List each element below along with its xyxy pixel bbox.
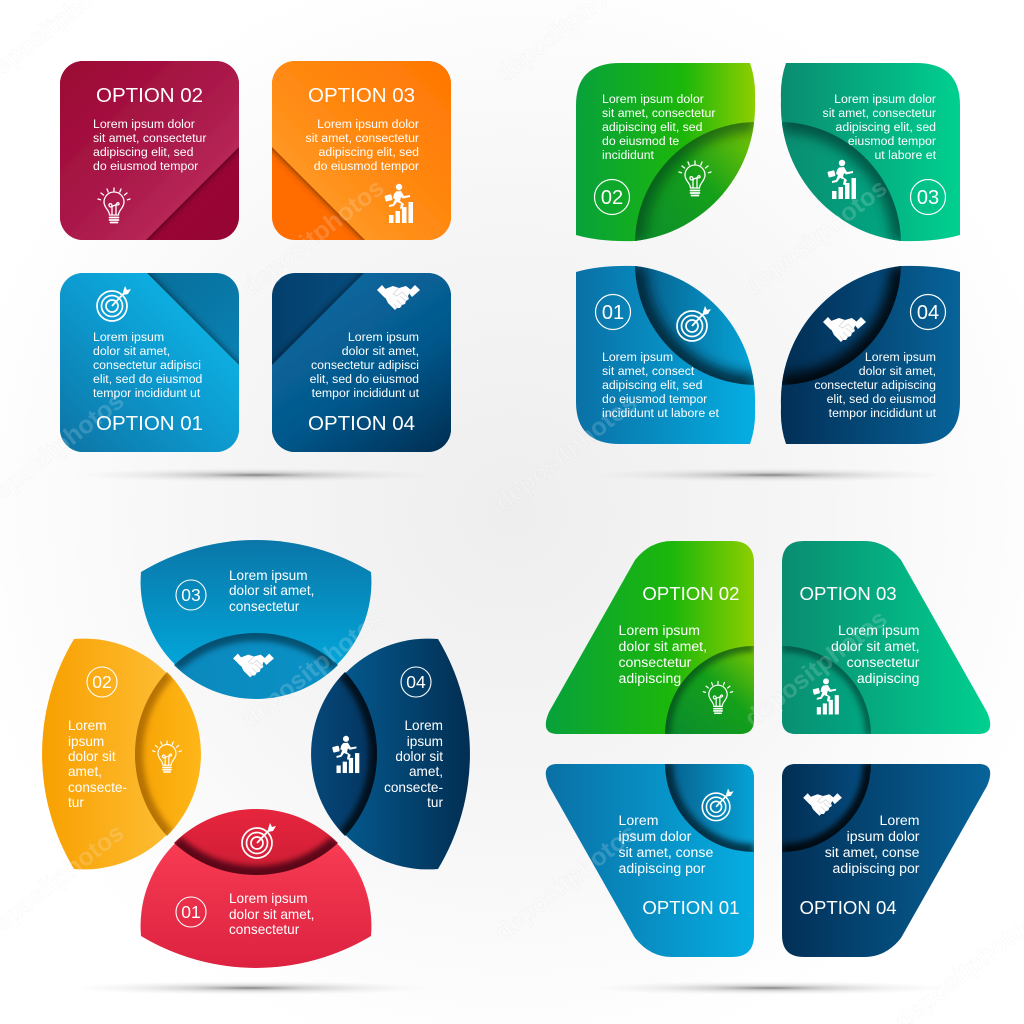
watermark: depositphotos (236, 605, 389, 733)
leaf shape: teal (780, 63, 960, 242)
text block: option 01: consectetur adipisci (93, 358, 201, 372)
leaf shape: green (576, 63, 756, 242)
text block: option 04: dolor sit amet, (342, 344, 419, 358)
text block: option 03: sit amet, consectetur (306, 131, 419, 145)
petal: 01 (136, 804, 376, 968)
text block: option 04: adipiscing por (833, 860, 920, 876)
text block: option 02: dolor sit amet, (618, 638, 707, 654)
text block: 04: amet, (409, 764, 443, 779)
text block: 04: Lorem (404, 718, 443, 733)
text block: 02: dolor sit (68, 749, 116, 764)
panel: pentagon tiles with quarter circles (540, 535, 996, 963)
text block: 03: Lorem ipsum dolor (834, 92, 936, 106)
text block: 03: adipiscing elit, sed (836, 120, 936, 134)
text block: 03: sit amet, consectetur (823, 106, 936, 120)
number badge: 01: 01 (602, 302, 624, 324)
text block: 04: dolor sit (395, 749, 443, 764)
text block: option 03: adipiscing elit, sed (319, 145, 419, 159)
text block: 02: tur (68, 795, 84, 810)
text block: option 03: Lorem ipsum (838, 622, 920, 638)
number badge: 04 (401, 667, 431, 697)
text block: 02: consecte- (68, 780, 127, 795)
text block: option 01: dolor sit amet, (93, 344, 170, 358)
text block: option 01: tempor incididunt ut (93, 386, 201, 400)
tile shape: green (546, 541, 754, 734)
text block: 01: sit amet, consect (602, 364, 695, 378)
tile shape: blue fold (60, 273, 239, 452)
text block: option 01: Lorem ipsum (93, 330, 164, 344)
text block: 01: adipiscing elit, sed (602, 378, 703, 392)
text block: 04: elit, sed do eiusmod (827, 392, 936, 406)
tile shape: teal (782, 541, 990, 734)
tile: option 03 (272, 61, 451, 240)
text block: option 02: Lorem ipsum dolor (93, 117, 195, 131)
text block: 02: Lorem ipsum dolor (602, 92, 704, 106)
heading: option 03: OPTION 03 (308, 84, 415, 107)
text block: option 02: adipiscing (618, 670, 681, 686)
icon: handshake (803, 793, 842, 816)
icon: target (242, 823, 276, 858)
heading: option 04: OPTION 04 (800, 897, 897, 918)
icon: light bulb (679, 161, 711, 196)
heading: option 01: OPTION 01 (642, 897, 740, 918)
text block: 01: incididunt ut labore et (602, 406, 719, 420)
text block: option 02: Lorem ipsum (618, 622, 700, 638)
tile: option 01 (60, 273, 239, 452)
tile shape: orange fold (272, 61, 451, 240)
icon: runner on bars (827, 160, 856, 199)
tile: option 02 (60, 61, 239, 240)
text block: option 04: Lorem ipsum (348, 330, 419, 344)
icon: light bulb (153, 741, 181, 772)
leaf shape: blue (576, 266, 756, 444)
text block: option 01: sit amet, conse (618, 844, 713, 860)
text block: option 02: consectetur (618, 654, 692, 670)
text block: 02: ipsum (68, 734, 104, 749)
tile shape: blue (546, 764, 754, 957)
icon: runner on bars (384, 184, 413, 223)
text block: 04: dolor sit amet, (859, 364, 936, 378)
heading: option 03: OPTION 03 (800, 583, 897, 604)
text block: 04: ipsum (407, 734, 443, 749)
text block: 04: tur (427, 795, 443, 810)
text block: 01: Lorem ipsum (602, 350, 673, 364)
petal shape: amber left (42, 634, 206, 874)
text block: 03: eiusmod tempor (848, 134, 936, 148)
text block: 01: Lorem ipsum (229, 891, 308, 906)
text block: 01: dolor sit amet, (229, 907, 314, 922)
text block: 01: do eiusmod tempor (602, 392, 707, 406)
number badge: 01 (176, 897, 206, 927)
text block: option 03: do eiusmod tempor (314, 159, 419, 173)
watermark: depositphotos (489, 819, 642, 947)
ground shadows (70, 468, 950, 995)
panel: circular four-petal diagram (42, 540, 470, 968)
heading: option 02: OPTION 02 (642, 583, 740, 604)
tile: option 04 (782, 764, 990, 957)
petal shape: red bottom (136, 804, 376, 968)
text block: option 01: adipiscing por (618, 860, 706, 876)
icon: handshake (377, 285, 420, 310)
icon: handshake (233, 654, 274, 677)
icon: runner on bars (812, 678, 839, 714)
text block: option 03: adipiscing (857, 670, 920, 686)
text block: 03: Lorem ipsum (229, 568, 308, 583)
text block: option 01: ipsum dolor (618, 828, 692, 844)
text block: 04: Lorem ipsum (865, 350, 936, 364)
icon: target (702, 788, 734, 821)
text block: 02: amet, (68, 764, 102, 779)
heading: option 01: OPTION 01 (96, 412, 203, 435)
leaf: 03 (780, 63, 960, 242)
leaf: 04 (780, 266, 960, 444)
petal: 04 (306, 634, 470, 874)
petal: 03 (136, 540, 376, 704)
text block: option 04: tempor incididunt ut (312, 386, 420, 400)
panel: leaf shapes with numbered circles (570, 60, 966, 447)
tile shape: crimson fold (60, 61, 239, 240)
watermark: depositphotos (739, 605, 892, 733)
watermark: depositphotos (489, 389, 642, 517)
icon: target (97, 286, 131, 321)
number badge: 02: 02 (601, 187, 623, 209)
icon: handshake (823, 317, 866, 342)
icon: light bulb (98, 188, 130, 222)
text block: option 03: dolor sit amet, (831, 638, 920, 654)
text block: option 01: elit, sed do eiusmod (93, 372, 203, 386)
text block: option 02: sit amet, consectetur (93, 131, 206, 145)
tile: option 01 (546, 764, 754, 957)
text block: option 02: adipiscing elit, sed (93, 145, 194, 159)
text block: 01: consectetur (229, 922, 300, 937)
text block: 03: dolor sit amet, (229, 583, 314, 598)
tile: option 02 (546, 541, 754, 734)
number badge: 03 (176, 580, 206, 610)
watermark: depositphotos (236, 174, 389, 302)
text block: 03: consectetur (229, 599, 300, 614)
tile: option 04 (272, 273, 451, 452)
number badge: 02 (594, 180, 630, 214)
text block: option 04: consectetur adipisci (311, 358, 419, 372)
number badge: 04: 04 (917, 302, 939, 324)
number badge: 04: 04 (406, 672, 426, 692)
icon: light bulb (703, 682, 733, 713)
text block: 02: sit amet, consectetur (602, 106, 715, 120)
text block: 02: Lorem (68, 718, 107, 733)
icon: target (677, 306, 711, 341)
number badge: 02: 02 (92, 672, 112, 692)
leaf: 01 (576, 266, 756, 444)
heading: option 04: OPTION 04 (308, 412, 415, 435)
petal: 02 (42, 634, 206, 874)
icon: runner on bars (332, 736, 359, 773)
text block: option 04: sit amet, conse (825, 844, 920, 860)
text block: 04: consecte- (384, 780, 443, 795)
tile shape: navy (782, 764, 990, 957)
heading: option 02: OPTION 02 (96, 84, 203, 107)
text block: option 03: consectetur (847, 654, 920, 670)
text block: 03: ut labore et (874, 148, 937, 162)
leaf shape: navy (780, 266, 960, 444)
panel: rounded square tiles with folded corners (50, 51, 461, 462)
text block: option 04: elit, sed do eiusmod (310, 372, 419, 386)
number badge: 01 (596, 294, 630, 330)
number badge: 03: 03 (917, 187, 939, 209)
number badge: 03: 03 (181, 585, 201, 605)
tile: option 03 (782, 541, 990, 734)
number badge: 01: 01 (181, 902, 201, 922)
text block: 02: incididunt (602, 148, 655, 162)
tile shape: navy fold (272, 273, 451, 452)
petal shape: blue top (136, 540, 376, 704)
petal shape: navy right (306, 634, 470, 874)
text block: 04: consectetur adipiscing (814, 378, 936, 392)
watermark: depositphotos (739, 174, 892, 302)
text block: option 04: Lorem (880, 812, 920, 828)
text block: 02: adipiscing elit, sed (602, 120, 703, 134)
number badge: 04 (910, 294, 946, 330)
text block: option 02: do eiusmod tempor (93, 159, 198, 173)
number badge: 03 (910, 180, 946, 214)
leaf: 02 (576, 63, 756, 242)
text block: 04: tempor incididunt ut (829, 406, 937, 420)
text block: 02: do eiusmod te (602, 134, 679, 148)
text block: option 04: ipsum dolor (847, 828, 920, 844)
number badge: 02 (87, 667, 117, 697)
text block: option 03: Lorem ipsum dolor (317, 117, 419, 131)
text block: option 01: Lorem (618, 812, 658, 828)
